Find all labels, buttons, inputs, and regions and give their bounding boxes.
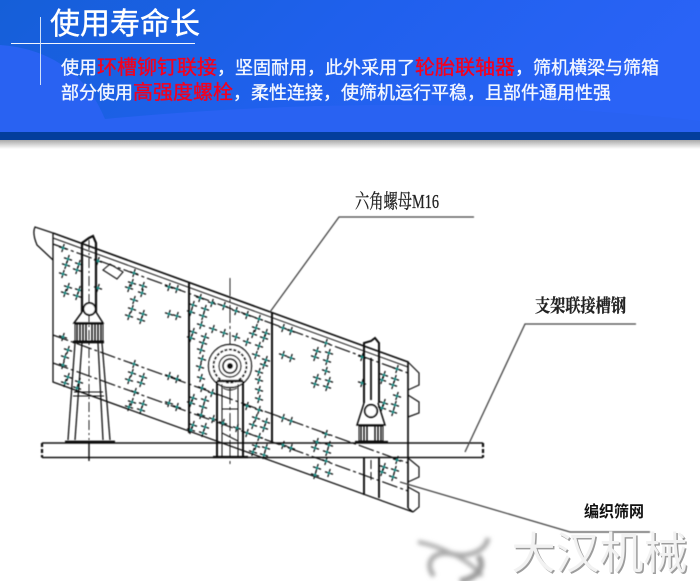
label: woven screen mesh: 编织筛网 xyxy=(584,502,644,521)
leader line: hex nut xyxy=(270,217,474,312)
stiffener ribs xyxy=(189,282,272,442)
nameplate xyxy=(103,264,123,279)
right support tower xyxy=(355,338,388,498)
left support tower xyxy=(65,236,115,442)
body text line 1: 使用环槽铆钉联接，坚固耐用，此外采用了轮胎联轴器，筛机横梁与筛箱 xyxy=(61,57,659,79)
support beam xyxy=(42,443,483,461)
label: hex nut M16: 六角螺母M16 xyxy=(355,190,439,213)
body text line 2: 部分使用高强度螺栓，柔性连接，使筛机运行平稳，且部件通用性强 xyxy=(61,82,611,104)
screen box outline xyxy=(34,227,413,512)
title: 使用寿命长 xyxy=(50,8,200,41)
label: bracket channel steel: 支架联接槽钢 xyxy=(535,296,626,316)
discharge hooks xyxy=(408,362,419,512)
deck lines xyxy=(53,244,408,491)
watermark text: 大汉机械 xyxy=(513,531,689,580)
leader line: bracket channel xyxy=(465,324,636,452)
watermark text: 大汉机械 xyxy=(512,530,688,578)
center exciter assembly xyxy=(208,278,252,465)
header banner xyxy=(0,0,700,148)
watermark logo xyxy=(418,538,488,581)
bolt pattern xyxy=(59,244,401,481)
leader line: woven mesh xyxy=(400,482,650,532)
